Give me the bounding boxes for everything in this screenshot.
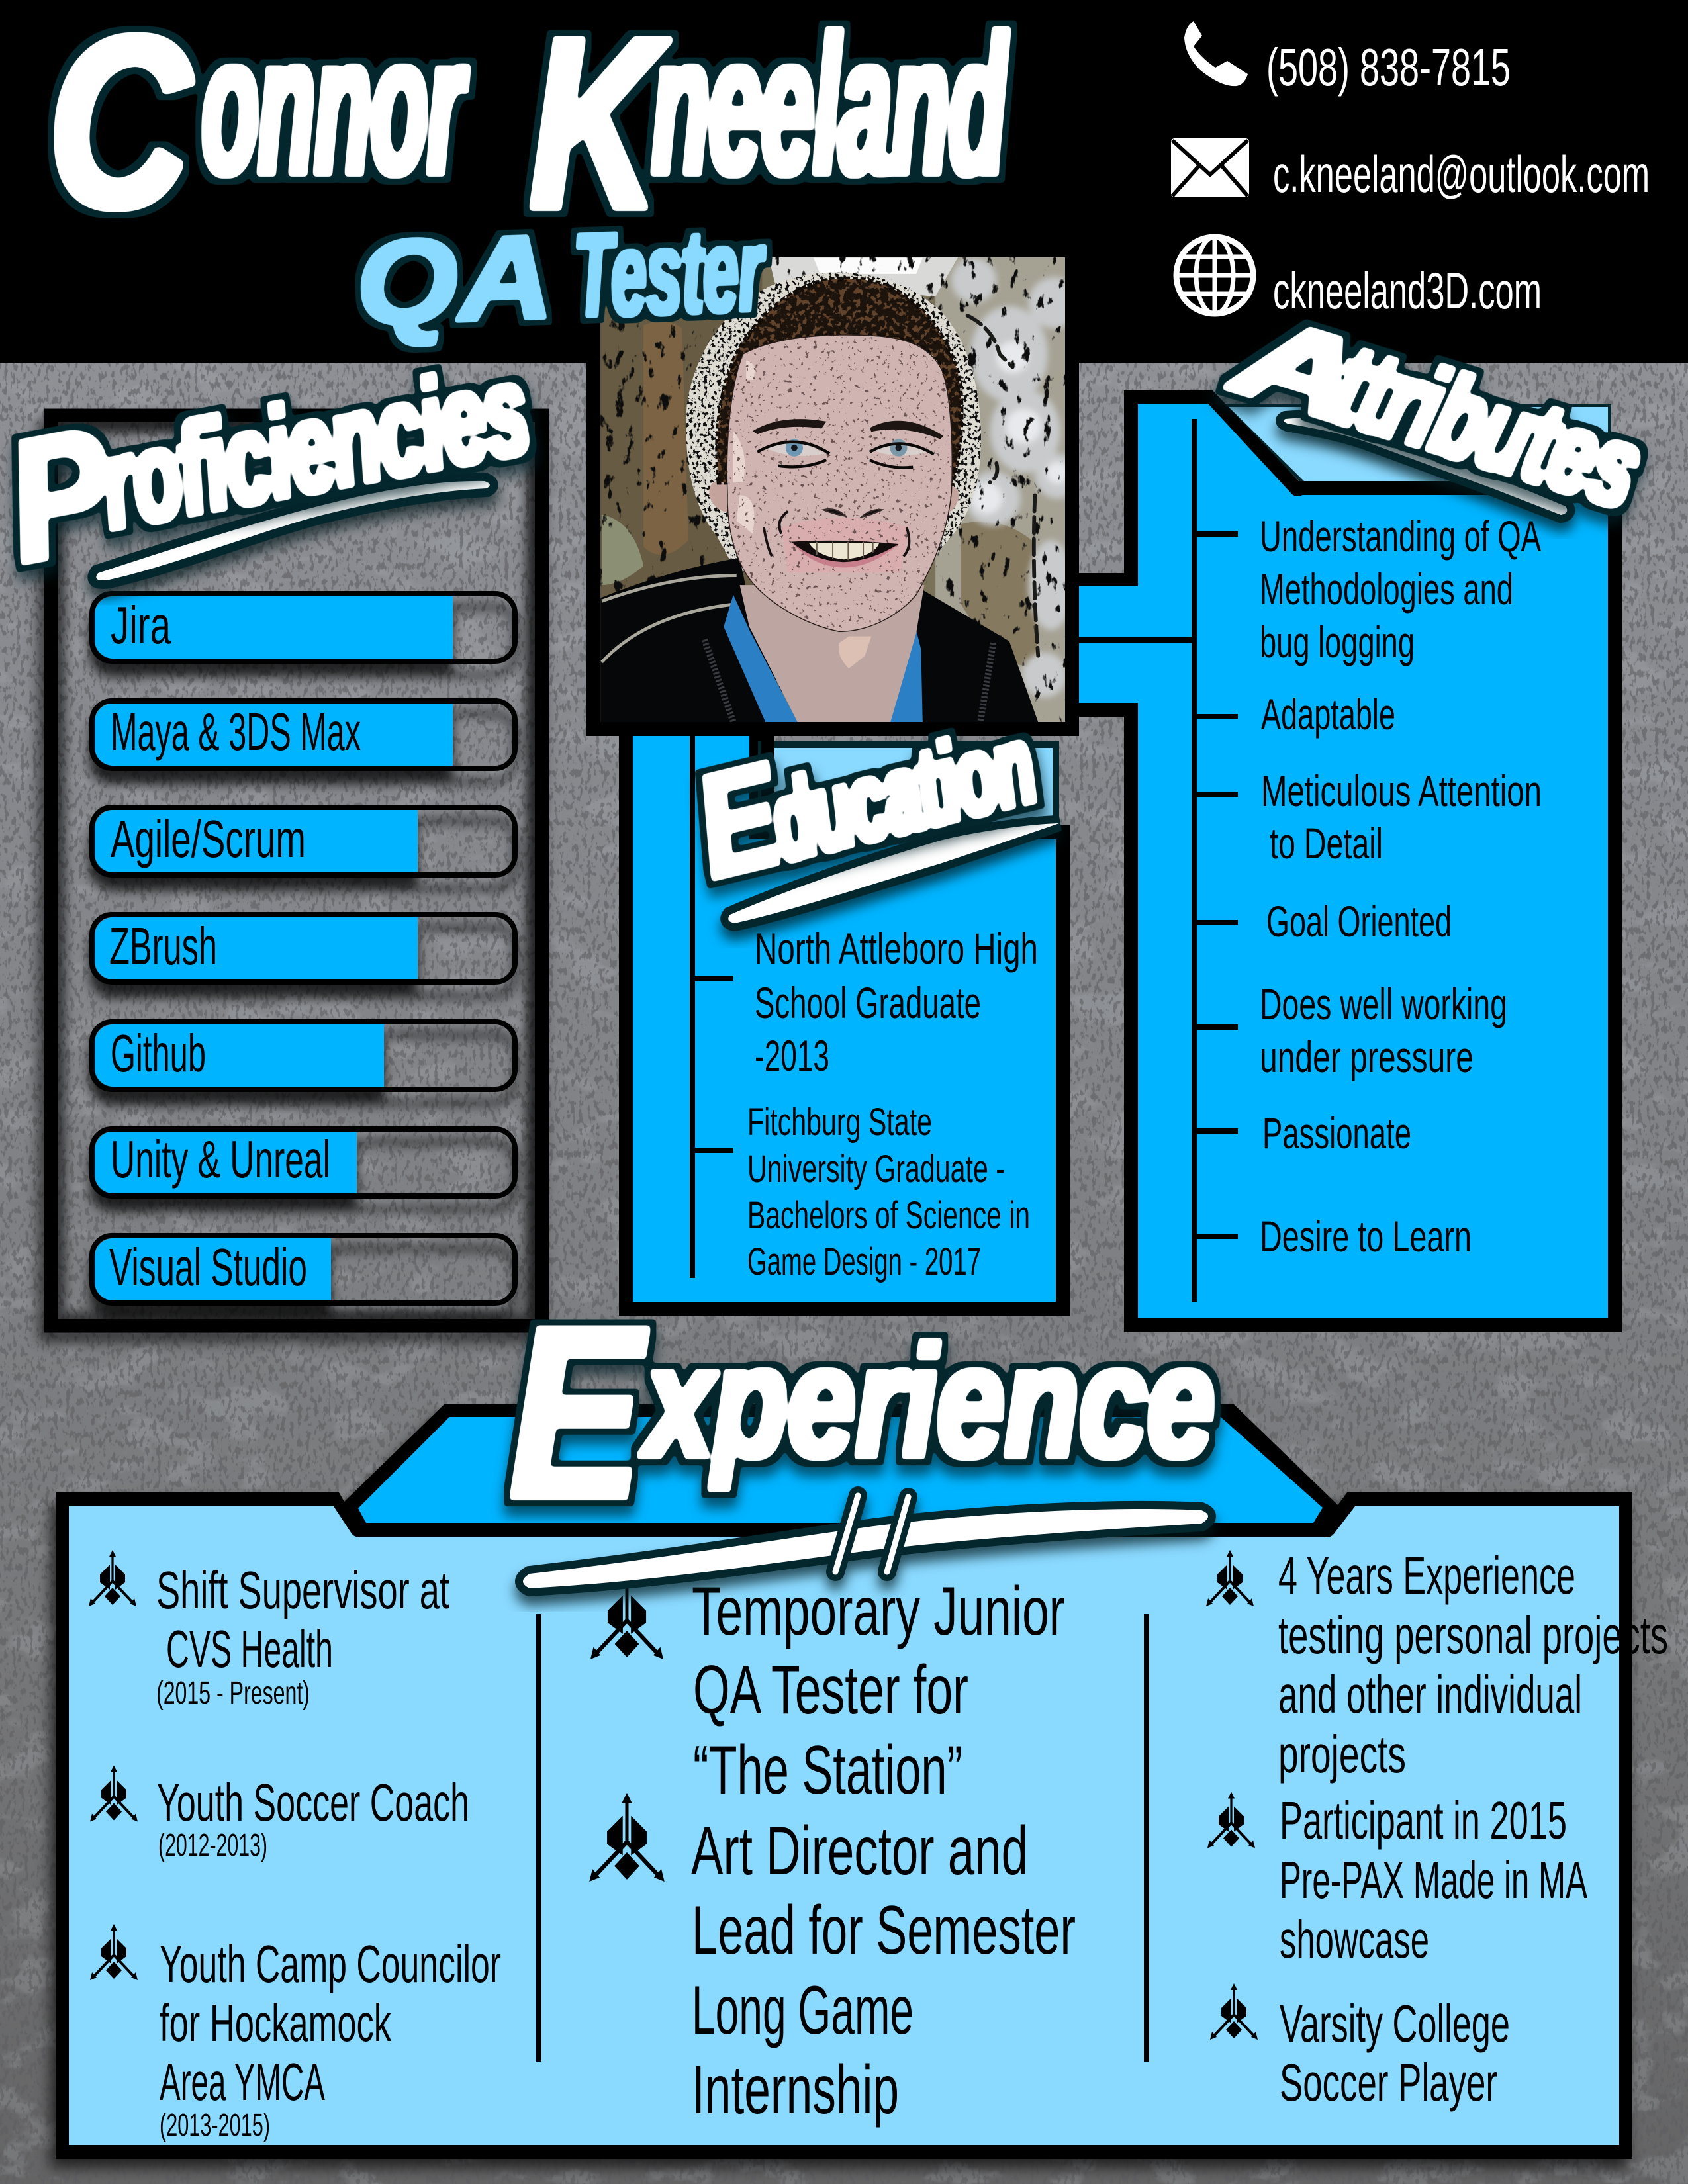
- text: experience left column: CVS Health: [166, 1619, 333, 1678]
- icon: envelope: [1171, 138, 1249, 197]
- text: university: Bachelors of Science in: [747, 1194, 1030, 1237]
- swash: education: [728, 823, 1059, 923]
- text: experience middle column: Internship: [692, 2052, 899, 2128]
- icon: globe: [1176, 237, 1253, 314]
- contact: phone: (508) 838-7815: [1266, 38, 1511, 97]
- text: high school: School Graduate: [755, 978, 981, 1027]
- timeline: attributes: [1079, 419, 1238, 1302]
- text: university: University Graduate -: [747, 1148, 1005, 1191]
- icons: middle column: [589, 1573, 665, 1882]
- text: attributes list: Passionate: [1262, 1109, 1411, 1158]
- bar: ZBrush: [92, 915, 515, 982]
- bar: Visual Studio: Visual Studio: [109, 1238, 307, 1297]
- contact: phone: [1184, 21, 1511, 97]
- text: experience middle column: Lead for Semester: [692, 1892, 1076, 1969]
- swash: proficiencies: [96, 481, 490, 580]
- contact: website: ckneeland3D.com: [1273, 261, 1542, 320]
- bar: ZBrush: ZBrush: [109, 917, 217, 976]
- text: high school: [755, 924, 1038, 1080]
- portrait: beanie: [682, 271, 987, 576]
- text: university: [747, 1101, 1030, 1283]
- text: experience middle column: “The Station”: [693, 1732, 962, 1809]
- heading: attributes: [1219, 288, 1656, 533]
- icon: phone: [1184, 21, 1248, 86]
- text: attributes list: Desire to Learn: [1260, 1212, 1472, 1261]
- tab: experience blue: [358, 1417, 1323, 1523]
- heading: proficiencies: roficiencies: [90, 336, 539, 557]
- text: experience left column: Youth Camp Councilor: [160, 1934, 501, 1993]
- text: attributes list: Methodologies and: [1260, 565, 1513, 614]
- text: attributes list: Goal Oriented: [1266, 897, 1452, 946]
- text: attributes list: to Detail: [1270, 819, 1383, 868]
- portrait: eyes: [757, 439, 934, 468]
- heading: experience: xperience: [640, 1312, 1215, 1490]
- portrait: eyebrows: [753, 419, 943, 439]
- bar: Jira: Jira: [111, 596, 171, 655]
- text: experience left column: (2015 - Present): [156, 1676, 310, 1711]
- swash: experience: [523, 1496, 1208, 1588]
- text: experience right column: projects: [1278, 1725, 1406, 1784]
- portrait: shirt: [724, 595, 923, 722]
- text: experience left column: (2012-2013): [158, 1828, 267, 1863]
- panel: photo frame: [586, 245, 1079, 736]
- heading: education: ducation: [760, 701, 1047, 885]
- tab: attributes light blue: [1229, 407, 1608, 481]
- text: attributes list: bug logging: [1260, 617, 1415, 666]
- heading: experience: [510, 1276, 1215, 1588]
- portrait: smile: [764, 512, 909, 567]
- text: attributes list: Does well working: [1260, 979, 1507, 1028]
- text: university: Game Design - 2017: [747, 1240, 981, 1283]
- panel: experience: [56, 1404, 1668, 2159]
- text: experience left column: Shift Supervisor at: [156, 1561, 449, 1619]
- panel: proficiencies: [52, 416, 541, 1326]
- portrait: face: [727, 335, 952, 631]
- bar: Unity and Unreal: Unity & Unreal: [111, 1130, 330, 1189]
- text: experience middle column: QA Tester for: [693, 1652, 968, 1729]
- text: experience left column: Area YMCA: [160, 2052, 325, 2111]
- heading: QA Tester: Tester: [572, 203, 769, 342]
- portrait: neck: [740, 585, 924, 722]
- text: attributes list: [1260, 512, 1542, 1261]
- header black band: [0, 0, 1688, 363]
- text: experience left column: (2013-2015): [160, 2108, 270, 2143]
- contact: website: [1176, 237, 1542, 320]
- text: neeland: [652, 0, 1009, 216]
- swash: attributes: [1284, 418, 1567, 515]
- panel: attributes: [1072, 390, 1622, 1332]
- text: attributes list: Understanding of QA: [1260, 512, 1541, 561]
- text: experience middle column: Art Director and: [691, 1813, 1028, 1889]
- portrait: nose: [823, 509, 882, 517]
- bar: Github: [92, 1022, 515, 1089]
- heading: name: onnor: [202, 0, 468, 216]
- bar: Maya and 3DS Max: Maya & 3DS Max: [111, 702, 361, 761]
- heading: education: [682, 672, 1059, 923]
- contact: email: [1171, 138, 1650, 203]
- text: experience left column: [156, 1561, 501, 2143]
- bar: Jira: [92, 594, 515, 661]
- bar: Agile/Scrum: Agile/Scrum: [111, 809, 306, 868]
- text: experience left column: for Hockamock: [160, 1993, 392, 2052]
- text: high school: -2013: [755, 1031, 829, 1080]
- panel: education: [619, 728, 1070, 1316]
- heading: attributes: A: [1219, 288, 1377, 449]
- text: experience middle column: [691, 1573, 1076, 2128]
- portrait: hair: [711, 271, 968, 495]
- text: university: Fitchburg State: [747, 1101, 932, 1144]
- heading: education: E: [682, 732, 797, 909]
- divider lines: [536, 1614, 1149, 2062]
- text: experience left column: Youth Soccer Coach: [157, 1773, 469, 1832]
- text: attributes list: Adaptable: [1261, 690, 1395, 739]
- portrait: jacket: [600, 558, 1038, 722]
- text: high school: North Attleboro High: [755, 924, 1038, 973]
- bar: Github: Github: [111, 1024, 206, 1083]
- text: experience right column: Varsity College: [1280, 1994, 1510, 2053]
- text: attributes list: Meticulous Attention: [1261, 766, 1542, 815]
- icons: left column: [89, 1550, 138, 1980]
- text: attributes list: under pressure: [1260, 1032, 1474, 1081]
- heading: proficiencies: [0, 315, 544, 599]
- icons: right column: [1206, 1550, 1258, 2040]
- text: experience right column: Soccer Player: [1280, 2053, 1497, 2112]
- text: experience middle column: Long Game: [692, 1972, 914, 2049]
- text: experience middle column: Temporary Junior: [692, 1573, 1065, 1650]
- text: experience right column: showcase: [1280, 1910, 1429, 1969]
- tab: education light blue: [761, 745, 1056, 825]
- photo: stylised portrait: [600, 257, 1080, 722]
- bar: Visual Studio: [92, 1236, 515, 1303]
- timeline: education: [690, 728, 733, 1278]
- text: experience right column: [1278, 1546, 1668, 2112]
- portrait: ears: [709, 481, 959, 513]
- heading: QA Tester: QA: [353, 210, 550, 350]
- heading: experience: E: [510, 1276, 649, 1549]
- bar: Agile/Scrum: [92, 807, 515, 875]
